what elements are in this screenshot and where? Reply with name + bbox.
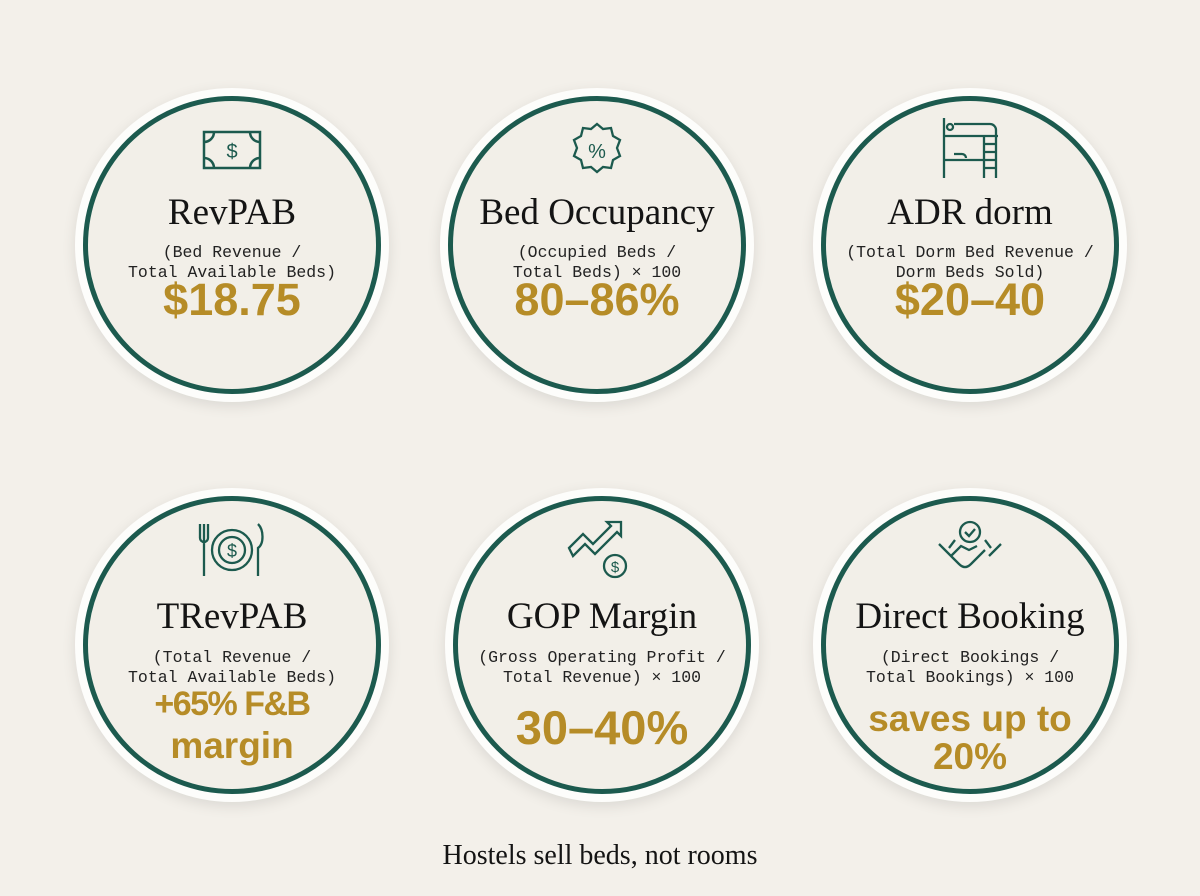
icon: percent badge: % [588,141,606,163]
value: +65% F&B [154,685,310,723]
value [154,685,310,766]
title: RevPAB [168,192,296,233]
title: GOP Margin [507,596,697,637]
formula: (Gross Operating Profit / [478,648,726,667]
icon: plate with cutlery [198,523,264,576]
value: 30–40% [516,701,688,754]
icon: handshake with check [938,520,1002,568]
value: margin [170,725,294,766]
formula [866,648,1074,687]
card: Direct Booking [813,488,1127,802]
card: RevPAB [75,88,389,402]
icon: plate with cutlery: $ [227,541,237,561]
card: ADR dorm [813,88,1127,402]
title: ADR dorm [887,192,1053,233]
formula: Total Revenue) × 100 [503,668,701,687]
formula [513,243,681,282]
card: Bed Occupancy [440,88,754,402]
formula: Total Available Beds) [128,668,336,687]
formula [128,648,336,687]
formula: (Occupied Beds / [518,243,676,262]
formula: Total Beds) × 100 [513,263,681,282]
card: TRevPAB [75,488,389,802]
formula: (Bed Revenue / [163,243,301,262]
value: $18.75 [163,274,301,325]
icon: trend arrow with coin [568,520,628,578]
formula [846,243,1094,282]
card: GOP Margin [445,488,759,802]
value: $20–40 [895,274,1045,325]
formula: Total Bookings) × 100 [866,668,1074,687]
formula: Total Available Beds) [128,263,336,282]
icon: bunk bed [942,118,998,178]
value: 80–86% [514,274,680,325]
formula [128,243,336,282]
title: Bed Occupancy [479,192,715,233]
formula: (Direct Bookings / [881,648,1059,667]
formula [478,648,726,687]
value: saves up to [868,698,1072,739]
icon: trend arrow with coin: $ [611,559,620,576]
title: TRevPAB [157,596,307,637]
value: 20% [933,736,1007,777]
icon: percent badge [572,122,622,174]
formula: Dorm Beds Sold) [896,263,1044,282]
icon: banknote [202,130,262,170]
title: Direct Booking [855,596,1085,637]
formula: (Total Dorm Bed Revenue / [846,243,1094,262]
value [868,698,1072,777]
formula: (Total Revenue / [153,648,311,667]
icon: banknote: $ [226,141,238,163]
footer caption: Hostels sell beds, not rooms [442,840,758,871]
